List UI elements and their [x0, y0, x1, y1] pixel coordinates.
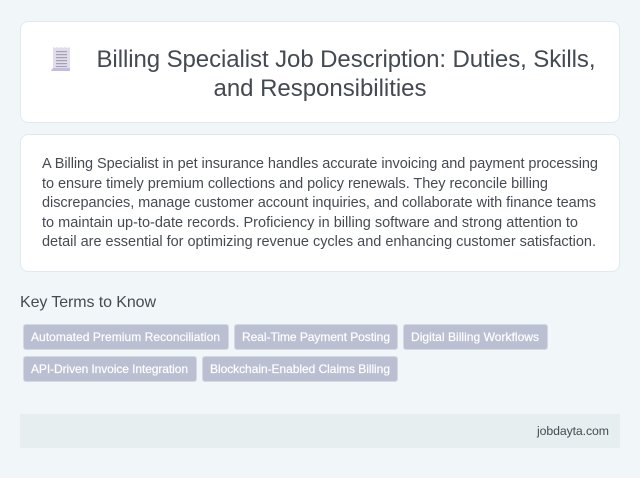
panel: title	[20, 21, 620, 123]
chip: automated premium reconciliation	[23, 324, 229, 350]
chip: real-time payment posting	[234, 324, 398, 350]
description text: discrepancies, manage customer account inquiries, and collaborate with finance teams	[42, 195, 596, 211]
description text: to maintain up-to-date records. Proficiency in billing software and strong attention to	[42, 215, 578, 231]
icon: billing receipt	[51, 47, 70, 71]
heading: key terms: Key Terms to Know	[20, 294, 156, 311]
chip: automated premium reconciliation: Automated Premium Reconciliation	[31, 330, 220, 344]
chip: digital billing workflows	[403, 324, 548, 350]
title text: and Responsibilities	[214, 75, 426, 102]
chip: real-time payment posting: Real-Time Payment Posting	[242, 330, 390, 344]
chip: api-driven invoice integration: API-Driven Invoice Integration	[31, 362, 188, 376]
panel: description	[20, 134, 620, 272]
chip: blockchain-enabled claims billing: Blockchain-Enabled Claims Billing	[210, 362, 390, 376]
description text: detail are essential for optimizing revenue cycles and enhancing customer satisfaction.	[42, 234, 596, 250]
description text: A Billing Specialist in pet insurance handles accurate invoicing and payment processing	[42, 156, 598, 172]
footer	[20, 414, 620, 448]
footer source text: jobdayta.com	[536, 424, 609, 438]
chip: digital billing workflows: Digital Billing Workflows	[411, 330, 539, 344]
description text: to ensure timely premium collections and policy renewals. They reconcile billing	[42, 176, 548, 192]
description text	[42, 156, 598, 250]
title text: Billing Specialist Job Description: Duties, Skills,	[96, 46, 596, 73]
chip: blockchain-enabled claims billing	[202, 356, 398, 382]
title text	[96, 46, 596, 102]
chip: api-driven invoice integration	[23, 356, 197, 382]
